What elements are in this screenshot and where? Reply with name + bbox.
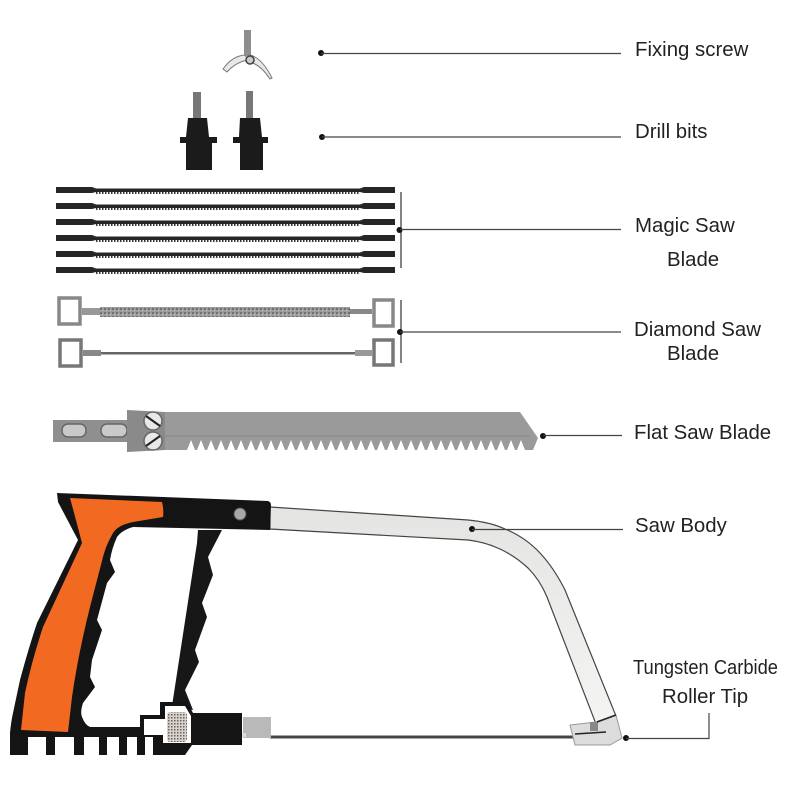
label: magic saw blade: Magic Saw [635,215,735,237]
label: diamond saw blade: Diamond Saw [634,319,761,341]
icon: fixing screw [223,30,272,79]
label: tungsten carbide roller tip: Tungsten Carbide [633,657,778,679]
label: tungsten carbide roller tip [633,657,778,708]
magic saw blades [56,187,395,273]
steel bow frame [270,507,616,724]
pin [234,508,246,520]
handle black frame [10,493,271,755]
label line: diamond saw blade [397,300,621,363]
label line: fixing screw [318,50,621,56]
label: tungsten carbide roller tip: Roller Tip [662,686,748,708]
label: fixing screw: Fixing screw [635,39,749,61]
label line: flat saw blade [540,433,622,439]
saw body [10,493,622,755]
label: magic saw blade [635,215,735,271]
diamond saw blades [59,298,393,366]
flat saw blade [53,410,538,452]
knurled nut [167,712,187,742]
label: magic saw blade: Blade [667,249,719,271]
orange grip [21,498,163,732]
label line: magic saw blade [396,192,621,268]
label line: saw body [469,526,623,532]
label: saw body: Saw Body [635,515,728,537]
stepped cavity [144,706,191,743]
icon: drill bits [180,91,268,170]
roller tip clip [570,715,622,745]
blade wire [222,717,575,738]
label: drill bits: Drill bits [635,121,708,143]
label: diamond saw blade: Blade [667,343,719,365]
label line: drill bits [319,134,621,140]
label: flat saw blade: Flat Saw Blade [634,422,771,444]
label: diamond saw blade [634,319,761,365]
inner grip [172,530,222,710]
label line: roller tip [623,713,709,741]
